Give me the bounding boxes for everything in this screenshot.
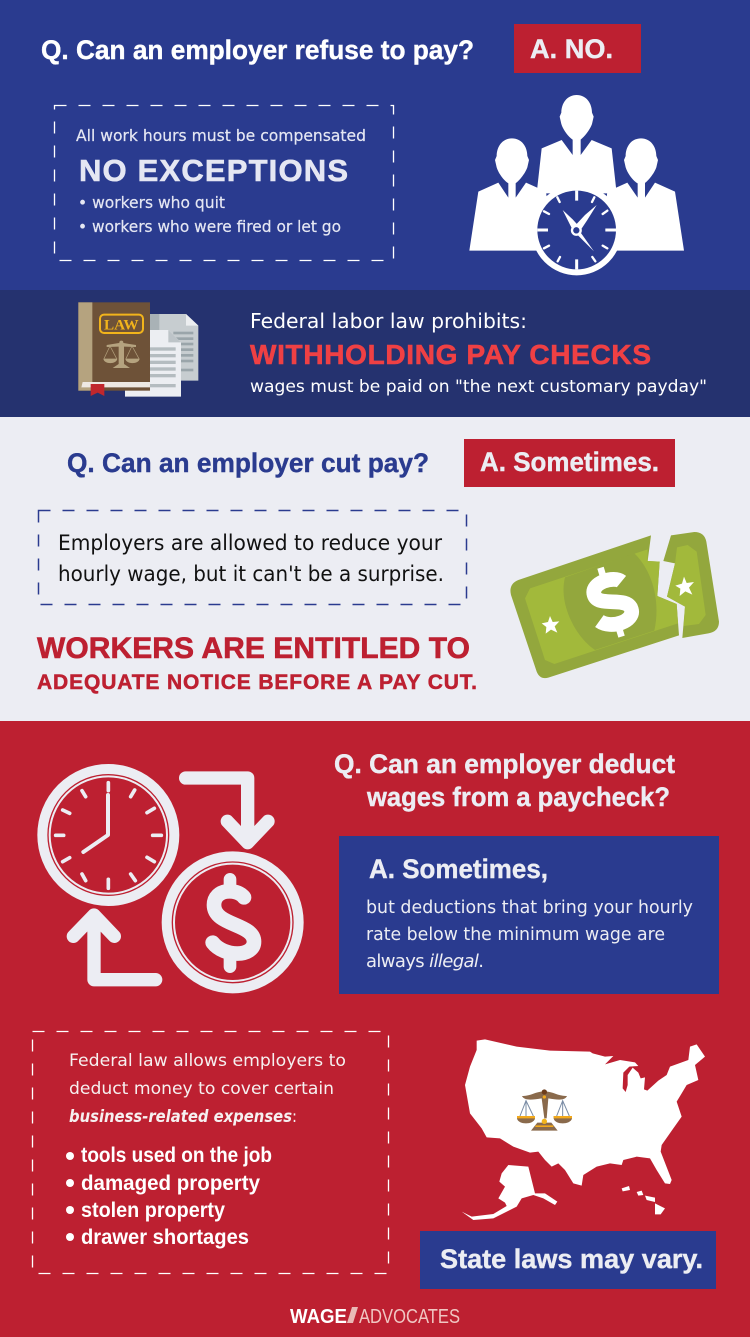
heading: question deduct wages — [334, 749, 675, 812]
list: deductible items — [66, 1144, 272, 1249]
logo: wage advocates: WAGE — [290, 1306, 347, 1328]
heading: question refuse to pay: Q. Can an employer refuse to pay? — [41, 35, 474, 65]
list: deductible items: stolen property — [81, 1199, 225, 1222]
callout: no exceptions — [54, 106, 394, 260]
answer box: deductions — [339, 836, 719, 994]
list: deductible items: damaged property — [81, 1172, 260, 1195]
list: deductible items: tools used on the job — [81, 1144, 272, 1167]
logo: wage advocates — [290, 1306, 460, 1328]
text: federal law prohibits: WITHHOLDING PAY CHECKS — [250, 339, 651, 370]
callout: state laws: State laws may vary. — [440, 1244, 703, 1274]
callout: no exceptions: • workers who quit — [78, 193, 225, 212]
answer box: deductions: rate below the minimum wage are — [366, 924, 665, 945]
list: deductible items: drawer shortages — [81, 1226, 249, 1249]
icon: workers with clock — [469, 95, 684, 272]
icon: us map with scales — [462, 1039, 705, 1220]
text: federal law prohibits: wages must be paid on "the next customary payday" — [250, 377, 707, 397]
panel: refuse to pay — [0, 0, 750, 290]
answer box: deductions: always illegal. — [366, 951, 484, 972]
answer box: no — [514, 24, 641, 73]
text: federal law prohibits: Federal labor law prohibits: — [250, 309, 527, 333]
callout: no exceptions: All work hours must be compensated — [76, 126, 366, 145]
icon: law book and documents — [78, 302, 198, 397]
text: federal law prohibits — [250, 309, 707, 397]
callout: business expenses: Federal law allows employers to — [69, 1051, 346, 1071]
heading: question deduct wages: Q. Can an employer deduct — [334, 749, 675, 779]
answer box: deductions: A. Sometimes, — [369, 854, 548, 884]
heading: question deduct wages: wages from a paycheck? — [366, 782, 670, 812]
answer box: deductions: but deductions that bring your hourly — [366, 897, 693, 918]
text: adequate notice: ADEQUATE NOTICE BEFORE A PAY CUT. — [37, 671, 477, 694]
answer box: sometimes: A. Sometimes. — [480, 447, 659, 477]
logo: wage advocates: ADVOCATES — [359, 1306, 460, 1328]
callout: reduce hourly wage — [38, 510, 466, 604]
icon: torn dollar bill — [510, 532, 719, 678]
callout: no exceptions: NO EXCEPTIONS — [79, 153, 348, 188]
icon: law book and documents: LAW — [104, 317, 139, 333]
panel: deduct wages — [0, 721, 750, 1337]
icon: clock and dollar cycle — [42, 769, 299, 988]
panel: federal labor law — [0, 290, 750, 417]
callout: business expenses: deduct money to cover certain — [69, 1079, 334, 1099]
callout: business expenses — [32, 1032, 388, 1274]
answer box: sometimes — [464, 439, 675, 487]
callout: reduce hourly wage: Employers are allowed to reduce your — [58, 531, 442, 555]
callout: reduce hourly wage: hourly wage, but it can't be a surprise. — [58, 562, 444, 586]
panel: cut pay — [0, 417, 750, 721]
callout: state laws — [420, 1231, 716, 1289]
text: adequate notice: WORKERS ARE ENTITLED TO — [37, 632, 470, 665]
answer box: no: A. NO. — [530, 34, 613, 64]
heading: question cut pay: Q. Can an employer cut pay? — [67, 448, 429, 478]
callout: business expenses: business-related expenses: — [69, 1107, 297, 1127]
text: adequate notice — [37, 632, 477, 694]
callout: no exceptions: • workers who were fired or let go — [78, 217, 341, 236]
